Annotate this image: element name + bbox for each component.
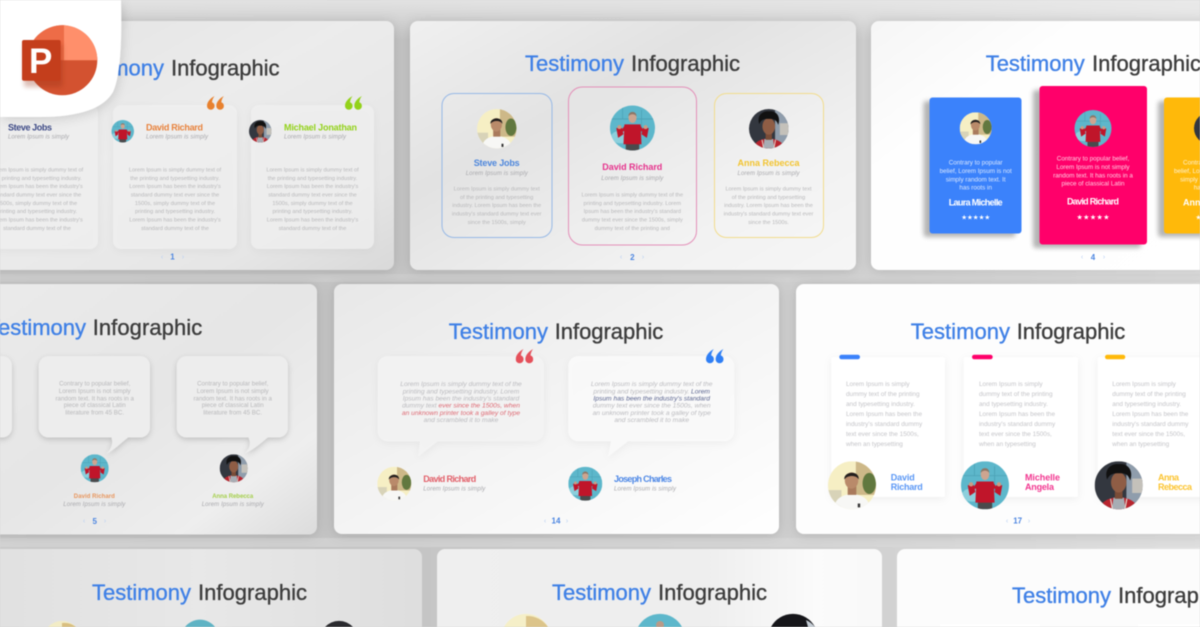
slide 4 title: Testimony [986, 51, 1085, 76]
card: David Richard tab: and typesetting industry. [846, 401, 915, 408]
card: Anna Rebecca tab: when an typesetting [1111, 441, 1170, 448]
slide 4 title [986, 51, 1200, 76]
card: Anna Rebecca outlined: Lorem Ipsum is simply dummy text [725, 186, 812, 192]
person: David Richard: David Richard [423, 474, 476, 484]
card: Anna Rebecca tab: Anna [1158, 472, 1180, 482]
card: Anna Rebecca tab: Lorem Ipsum has been the [1112, 411, 1189, 418]
slide 1 title: Testimony [65, 56, 164, 80]
bubble: red quote: dummy text ever since the 1500s, when [402, 403, 520, 410]
card: Laura Michelle blue: Laura Michelle [949, 198, 1003, 208]
card: David Richard pink: ★★★★★ [1076, 214, 1110, 222]
card: Laura Michelle blue: Contrary to popular [949, 160, 1003, 167]
bottom left title [92, 580, 307, 605]
card: Steve Jobs outlined: industry's standard dummy text ever [452, 212, 542, 218]
pagination 4 [1081, 253, 1106, 262]
bubble: red quote: Lorem Ipsum is simply dummy text of the [400, 381, 522, 388]
card: David Richard outlined: printing and typesetting industry. Lorem [584, 201, 681, 207]
pagination 17: 17 [1013, 516, 1023, 526]
slide 1 title [65, 56, 280, 80]
person: Anna Rebecca: Anna Rebecca [212, 494, 254, 500]
slide 5 title [0, 315, 202, 340]
card: Anna Rebecca outlined: industry's standard dummy text ever [724, 212, 813, 218]
panel: slide 2 outlined cards [410, 21, 856, 270]
pagination 2: › [642, 254, 645, 261]
card: David Richard: Lorem Ipsum has been the industry's [129, 184, 221, 190]
panel: slide 1 three testimony cards [0, 21, 394, 270]
bubble: red quote: an unknown printer took a galley of type [402, 410, 520, 417]
card: David Richard: standard dummy text ever since the [131, 192, 219, 198]
card: Steve Jobs: Steve Jobs [8, 122, 52, 132]
pagination 5 [83, 517, 107, 526]
PowerPoint badge [0, 0, 121, 117]
card: David Richard outlined: Ipsum has been the industry's standard [584, 209, 681, 215]
card: David Richard tab: text ever since the 1500s, [846, 431, 919, 438]
card: Anna Rebecca tab: Lorem Ipsum is simply [1112, 381, 1177, 388]
card: David Richard tab: David [891, 472, 915, 482]
card: David Richard outlined: dummy text of the printing and [595, 226, 670, 232]
person: David Richard: Lorem Ipsum is simply [423, 486, 486, 492]
card: David Richard pink: David Richard [1067, 196, 1119, 206]
bubble: blue quote: Lorem Ipsum is simply dummy text of the [591, 381, 713, 388]
card: Anna Rebecca outlined: Lorem Ipsum is simply [738, 171, 800, 177]
card: David Richard tab: Richard [891, 482, 923, 492]
bubble: blue quote: Ipsum has been the industry's standard [593, 395, 710, 402]
pagination 1: 1 [170, 252, 175, 262]
panel: slide 14 quote bubbles [334, 284, 779, 534]
bubble: Anna Rebecca: piece of classical Latin [202, 402, 264, 409]
slide 14 title: Infographic [555, 319, 663, 344]
card: David Richard tab: dummy text of the printing [846, 391, 920, 398]
pagination 2 [620, 253, 645, 262]
card: Anna Rebecca tab [1095, 355, 1200, 509]
bubble: blue quote: an unknown printer took a galley of type [593, 410, 711, 417]
bubble: David Richard: literature from 45 BC. [65, 409, 124, 416]
card: David Richard: David Richard [146, 122, 203, 132]
card: Michael Jonathan: 1500s, simply dummy text of the [272, 201, 353, 207]
card: Michelle Angela tab: Michelle [1025, 472, 1060, 482]
card: Steve Jobs outlined: Lorem Ipsum is simply dummy text [454, 186, 540, 192]
panel: bottom slide left [0, 549, 422, 627]
bubble: Anna Rebecca: Contrary to popular belief, [197, 381, 269, 388]
bubble: Anna Rebecca: random text. It has roots in a [193, 395, 272, 402]
card: David Richard outlined: David Richard [602, 162, 662, 172]
person: David Richard: David Richard [74, 494, 115, 500]
bottom middle title [552, 580, 767, 605]
bubble: David Richard: Lorem Ipsum is not simply [59, 388, 132, 395]
pagination 14: › [566, 518, 569, 525]
avatars row left (tops only) [48, 620, 353, 627]
pagination 14: ‹ [544, 518, 547, 525]
card tops [940, 624, 1200, 627]
card: Laura Michelle blue: belief, Lorem Ipsum is not [940, 168, 1012, 175]
card: Steve Jobs: Lorem Ipsum is simply [8, 134, 70, 140]
card: Steve Jobs outlined [442, 94, 552, 238]
card: Michael Jonathan: standard dummy text ever since the [268, 192, 357, 198]
bubble: David Richard [39, 356, 150, 454]
pagination 5: ‹ [83, 518, 86, 525]
card: David Richard outlined: dummy text ever since the 1500s, simply [582, 218, 683, 224]
pagination 17 [1006, 516, 1031, 526]
card: Steve Jobs outlined: industry. Lorem Ipsum has been the [452, 203, 541, 209]
pagination 4: 4 [1091, 253, 1096, 262]
pagination 1: › [182, 254, 185, 261]
bubble: David Richard: piece of classical Latin [64, 402, 126, 409]
card: Steve Jobs outlined: Steve Jobs [474, 158, 520, 168]
card: Michelle Angela tab: text ever since the 1500s, [979, 431, 1052, 438]
person: David Richard: Lorem Ipsum is simply [63, 502, 126, 508]
card: Michael Jonathan: standard dummy text of the [279, 226, 346, 232]
card: David Richard outlined [568, 87, 696, 245]
card: Michelle Angela tab: Angela [1025, 482, 1055, 492]
person: Joseph Charles: Lorem Ipsum is simply [614, 486, 677, 492]
panel: slide 5 speech bubbles [0, 284, 317, 534]
card: Michael Jonathan [249, 96, 374, 249]
card: David Richard: Lorem Ipsum is simply [146, 134, 209, 140]
bubble: red quote: Ipsum has been the industry's standard [403, 395, 520, 402]
panel: bottom slide right [897, 549, 1200, 627]
bubble: red quote [378, 349, 544, 457]
card: Steve Jobs outlined: Lorem Ipsum is simply [466, 171, 529, 177]
pagination 5: 5 [92, 517, 97, 526]
slide 17 title [911, 319, 1125, 344]
pagination 1 [161, 252, 185, 262]
card: David Richard: standard dummy text of the [141, 226, 209, 232]
panel: slide 17 tabbed cards [796, 284, 1200, 534]
card: Laura Michelle blue: has roots in [959, 185, 992, 192]
card: Anna Rebecca outlined: industry. Lorem Ipsum has been the [724, 203, 813, 209]
card: Anna yellow [1158, 98, 1200, 237]
bubble: blue quote: dummy text ever since the 1500s, when [593, 403, 711, 410]
pagination 2: 2 [630, 253, 635, 262]
bottom right title [1012, 583, 1200, 608]
card: Michael Jonathan: printing and typesetting industry. [272, 209, 353, 215]
card: David Richard [112, 96, 237, 249]
card: Anna Rebecca tab: Rebecca [1158, 482, 1193, 492]
card: Anna Rebecca outlined: since the 1500s. [748, 220, 789, 226]
pagination 5: › [104, 518, 107, 525]
card: Michelle Angela tab: dummy text of the printing [979, 391, 1053, 398]
card: David Richard pink: Lorem Ipsum is not simply [1056, 164, 1130, 171]
card: Laura Michelle blue: simply random text. It [946, 176, 1006, 183]
slide 2 title [525, 51, 740, 76]
bubble: red quote: and scrambled it to make [424, 417, 499, 424]
bubble: blue quote [568, 349, 734, 457]
slide 14 title: Testimony [449, 319, 548, 344]
bottom left title: Testimony [92, 580, 191, 605]
bubble: Anna Rebecca: literature from 45 BC. [203, 409, 262, 416]
bottom left title: Infographic [198, 580, 307, 605]
bubble: red quote: printing and typesetting industry. Lorem [402, 388, 520, 395]
card: Anna Rebecca tab: text ever since the 1500s, [1112, 431, 1185, 438]
card: Michael Jonathan: the printing and typesetting industry. [268, 176, 358, 182]
card: Michael Jonathan: Lorem Ipsum has been the industry's [267, 184, 358, 190]
bubble: left partial [0, 356, 12, 438]
bottom right title: Testimony [1012, 583, 1111, 608]
pagination 4: › [1103, 254, 1106, 261]
pagination 14 [544, 516, 569, 526]
icon: PowerPoint logo: P [29, 42, 52, 81]
card: David Richard tab: industry's standard dummy [846, 421, 923, 428]
slide 4 title: Infographic [1092, 51, 1200, 76]
card: Michael Jonathan: Michael Jonathan [284, 122, 357, 132]
card: David Richard outlined: Lorem Ipsum is simply [601, 176, 664, 182]
card: David Richard pink: Contrary to popular belief, [1057, 156, 1129, 163]
person: David Richard [63, 454, 126, 508]
card: David Richard pink: random text. It has roots in a [1053, 172, 1133, 179]
slide 17 title: Testimony [911, 319, 1010, 344]
panel: bottom slide middle [437, 549, 882, 627]
pagination 14: 14 [552, 516, 561, 526]
card: Michelle Angela tab: Lorem Ipsum has been the [979, 411, 1055, 418]
person: Anna Rebecca [202, 454, 265, 508]
card: Michelle Angela tab: and typesetting industry. [979, 401, 1048, 408]
bubble: blue quote: and scrambled it to make [614, 417, 689, 424]
card: David Richard pink: piece of classical Latin [1061, 181, 1125, 188]
card: Michael Jonathan: Lorem Ipsum is simply dummy text of [266, 168, 359, 174]
panel: slide 4 coloured cards [871, 21, 1200, 270]
slide 17 title: Infographic [1017, 319, 1125, 344]
person: Anna Rebecca: Lorem Ipsum is simply [202, 502, 265, 508]
slide 2 title: Testimony [525, 51, 624, 76]
bubble: Anna Rebecca [177, 356, 288, 454]
card: David Richard: printing and typesetting industry. [135, 209, 216, 215]
card: David Richard tab: Lorem Ipsum is simply [846, 381, 910, 388]
card: Steve Jobs: standard dummy text of the [3, 226, 71, 232]
card: Steve Jobs outlined: of the printing and typesetting [460, 195, 533, 201]
card: Anna Rebecca outlined [714, 94, 824, 238]
card: Anna Rebecca tab: and typesetting industry. [1112, 401, 1181, 408]
slide 2 title: Infographic [631, 51, 740, 76]
slide 5 title: Infographic [93, 315, 202, 340]
pagination 1: ‹ [161, 254, 164, 261]
person: Joseph Charles: Joseph Charles [614, 474, 672, 484]
card: Anna Rebecca outlined: of the printing and typesetting [732, 195, 805, 201]
bottom middle title: Infographic [658, 580, 767, 605]
card: David Richard: Lorem Ipsum is simply dummy text of [129, 168, 222, 174]
person: Joseph Charles [568, 467, 677, 501]
card: Steve Jobs [0, 105, 98, 249]
card: Michelle Angela tab [961, 355, 1078, 509]
card: Michael Jonathan: Lorem Ipsum is simply [284, 134, 347, 140]
card: David Richard: the printing and typesetting industry. [130, 176, 220, 182]
avatars row middle (tops only) [504, 614, 815, 627]
card: David Richard pink [1033, 86, 1147, 248]
card: David Richard: Lorem Ipsum has been the industry's [129, 218, 221, 224]
card: Anna Rebecca tab: dummy text of the printing [1112, 391, 1186, 398]
bubble: blue quote: printing and typesetting industry. Lorem [592, 388, 710, 395]
pagination 2: ‹ [620, 254, 623, 261]
card: Steve Jobs outlined: since the 1500s, simply [468, 220, 526, 226]
card: David Richard tab: when an typesetting [845, 441, 903, 448]
bubble: Anna Rebecca: Lorem Ipsum is not simply [197, 388, 270, 395]
card: Michelle Angela tab: when an typesetting [978, 441, 1036, 448]
card: David Richard: 1500s, simply dummy text of the [135, 201, 215, 207]
card: Michael Jonathan: Lorem Ipsum has been the industry's [267, 218, 358, 224]
person: David Richard [377, 467, 486, 501]
card: Laura Michelle blue [924, 98, 1022, 237]
card: David Richard tab [828, 355, 945, 509]
card: Anna Rebecca outlined: Anna Rebecca [738, 158, 800, 168]
bubble: David Richard: random text. It has roots in a [55, 395, 134, 402]
card: Michelle Angela tab: Lorem Ipsum is simply [979, 381, 1043, 388]
card: David Richard outlined: Lorem Ipsum is simply dummy text of the [581, 192, 683, 198]
pagination 17: › [1028, 518, 1031, 525]
bubble: David Richard: Contrary to popular belief, [59, 381, 131, 388]
card: Laura Michelle blue: ★★★★★ [961, 214, 990, 222]
slide 14 title [449, 319, 663, 344]
card: Anna Rebecca tab: industry's standard dummy [1112, 421, 1189, 428]
card: David Richard tab: Lorem Ipsum has been the [846, 411, 922, 418]
slide 1 title: Infographic [171, 56, 280, 80]
pagination 17: ‹ [1006, 518, 1009, 525]
card: Michelle Angela tab: industry's standard dummy [979, 421, 1056, 428]
bottom middle title: Testimony [552, 580, 651, 605]
pagination 4: ‹ [1081, 254, 1084, 261]
